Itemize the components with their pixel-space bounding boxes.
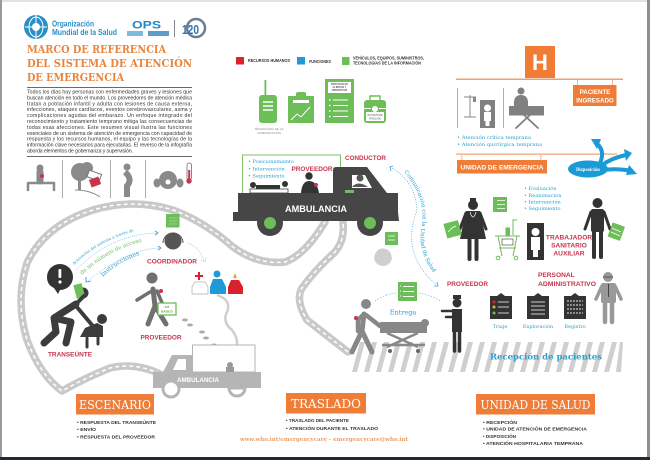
functions panel — [242, 155, 340, 195]
organization name: Organización — [52, 20, 94, 28]
functions list — [524, 185, 562, 212]
icon: protocols document: CLÍNICOS Y — [333, 86, 347, 89]
icon: walking provider — [137, 272, 176, 324]
truck body: AMBULANCIA — [285, 204, 348, 214]
icon: chart clipboard — [288, 92, 314, 123]
organization name — [52, 20, 117, 37]
thin road to gray ambulance — [217, 295, 237, 345]
icon: walking provider: KIT — [165, 305, 170, 309]
intro text: todas esas afecciones. Este resumen visual ilustra las funciones — [27, 125, 192, 131]
disposition arrows — [568, 139, 637, 178]
icon: radio: COMUNICACIÓN — [257, 130, 281, 135]
disposition arrows: Disposición — [576, 166, 600, 173]
icon: hospital H: H — [532, 50, 548, 75]
gray ambulance: AMBULANCIA — [177, 377, 219, 384]
gray ambulance — [153, 345, 261, 397]
wheels — [257, 210, 383, 236]
intro text — [27, 90, 192, 154]
intro text: información clave necesarios para ejecutarlas. El reverso de la infografía — [27, 143, 192, 149]
panel: traslado: • TRASLADO DEL PACIENTE — [286, 418, 349, 423]
intro text: aborda elementos de gobernanza y supervisión. — [27, 148, 133, 154]
handover: Entrega — [390, 308, 416, 316]
icon: green document — [493, 197, 507, 212]
logo: 120: 120 — [182, 22, 199, 37]
label: administrative staff — [538, 272, 596, 288]
icon: equipment cart — [495, 220, 520, 260]
emergency unit box: UNIDAD DE EMERGENCIA — [460, 164, 544, 172]
icon: child — [80, 314, 107, 347]
call section — [40, 214, 261, 398]
label: auxiliary health worker: SANITARIO — [551, 242, 587, 250]
truck body — [233, 167, 399, 221]
triage clipboard — [490, 293, 512, 330]
exploration clipboard — [523, 293, 554, 330]
icon: chest pain — [28, 164, 54, 190]
label: administrative staff: PERSONAL — [538, 272, 575, 279]
icon: hospital H — [525, 46, 555, 78]
icon: bystander with alert — [44, 264, 92, 343]
label: provider: PROVEEDOR — [292, 166, 333, 173]
label: patient reception: Recepción de pacientes — [490, 352, 603, 362]
dispatch vehicles — [192, 270, 243, 294]
legend: human resources: RECURSOS HUMANOS — [248, 58, 290, 63]
intro text: esenciales de un sistema de atención de emergencia con capacidad de — [27, 131, 192, 137]
emergency unit staff — [443, 185, 625, 260]
label: administrative staff: ADMINISTRATIVO — [538, 281, 596, 288]
functions list: • Reanimación — [524, 192, 562, 199]
activation arcs: Instrucciones — [100, 252, 140, 277]
panel: unidad de salud: • DISPOSICIÓN — [483, 432, 517, 439]
intro text: Todos los días hay personas con enfermedades graves y lesiones que — [27, 90, 192, 96]
panel: unidad de salud: UNIDAD DE SALUD — [480, 397, 590, 412]
legend: functions — [297, 57, 331, 64]
icon: walking provider: BÁSICO — [161, 308, 173, 314]
icon: transport kit — [364, 96, 386, 123]
icon: protocols document — [325, 79, 354, 123]
legend — [236, 54, 424, 66]
intro text: infecciones, ataques cardíacos, eventos cerebrovasculares, asma y — [27, 107, 192, 113]
icon: road accident — [71, 162, 102, 197]
organization name: Mundial de la Salud — [52, 28, 117, 37]
panel: traslado: TRASLADO — [291, 396, 361, 411]
icon: stretcher with patient — [380, 319, 429, 353]
label: coordinator: COORDINADOR — [147, 258, 197, 266]
title — [27, 43, 192, 84]
icon: protocols document: PROTOCOLOS — [331, 83, 348, 86]
title: MARCO DE REFERENCIA — [27, 43, 166, 56]
crosswalk — [352, 342, 623, 372]
handover — [375, 282, 441, 316]
icon: sick child — [154, 171, 184, 189]
coordinator green document and headset at truck — [374, 232, 398, 266]
early care list: • Atención quirúrgica temprana — [457, 141, 542, 148]
panel: unidad de salud: • RECEPCIÓN — [483, 418, 518, 425]
footprints — [182, 318, 220, 354]
icon: green clipboard — [443, 220, 462, 239]
register clipboard — [564, 293, 586, 330]
activation arcs: Activación del sistema a través de — [73, 229, 134, 265]
icon: stretcher carrier — [352, 299, 380, 352]
communication with health unit — [390, 166, 438, 286]
early care list — [457, 134, 542, 148]
activation arcs: de un número de acceso — [80, 239, 142, 274]
label: bystander: TRANSEÚNTE — [48, 350, 93, 358]
icon: transport kit: TRASLADO — [369, 118, 381, 120]
emergency unit top — [456, 46, 637, 178]
legend: vehicles and equipment — [342, 54, 424, 66]
panel: escenario — [76, 394, 156, 440]
road — [21, 204, 348, 391]
main ambulance — [233, 155, 399, 236]
label: conductor: CONDUCTOR — [345, 155, 386, 162]
icon: coordinator — [163, 214, 206, 262]
panel: unidad de salud — [476, 394, 595, 446]
icon: nurse — [460, 198, 486, 259]
logo: OPS — [127, 20, 169, 36]
legend: functions: FUNCIONES — [309, 59, 331, 64]
register clipboard: Registro — [564, 324, 586, 330]
admitted patient box: INGRESADO — [576, 98, 614, 104]
reception — [352, 272, 623, 372]
icon: thermometer — [186, 163, 192, 184]
functions list: • Seguimiento — [524, 206, 560, 212]
activation arcs — [73, 229, 162, 282]
panel: unidad de salud: • UNIDAD DE ATENCIÓN DE EMERGENCIA — [483, 424, 588, 432]
icon: auxiliary worker — [585, 198, 610, 257]
intro text: respuesta y los recursos humanos, el equipo y las tecnologías de la — [27, 137, 192, 143]
label: provider: PROVEEDOR — [140, 334, 182, 342]
panel: escenario: ESCENARIO — [79, 397, 151, 412]
legend: vehicles and equipment: TECNOLOGÍAS DE LA INFORMACIÓN — [353, 58, 421, 66]
intro text: tratan a población infantil y adulta con lesiones de causa externa, — [27, 101, 192, 107]
condition icons row — [28, 160, 192, 198]
panel: escenario: • ENVÍO — [77, 425, 96, 432]
admitted patient box: PACIENTE — [580, 89, 610, 96]
legend: human resources — [236, 57, 290, 64]
functions panel: • Seguimiento — [248, 174, 284, 180]
icon: administrative man — [596, 272, 621, 322]
icon: patient on bed — [527, 223, 544, 260]
logo: OPS: OPS — [132, 20, 161, 32]
functions panel: • Posicionamiento — [248, 159, 294, 165]
intro text: complicaciones agudas del embarazo. Un enfoque integrado del — [27, 113, 192, 119]
title: DE EMERGENCIA — [27, 71, 124, 84]
functions list: • Intervención — [524, 198, 562, 206]
label: auxiliary health worker: TRABAJADOR — [546, 234, 592, 242]
icon: radio — [254, 80, 284, 135]
emergency unit box — [457, 160, 547, 174]
communication with health unit: Comunicación con la Unidad de Salud — [405, 170, 436, 272]
functions list: • Evaluación — [524, 185, 557, 192]
legend: vehicles and equipment: VEHÍCULOS, EQUIPOS, SUMINISTROS, — [353, 54, 424, 60]
logo: WHO — [24, 15, 48, 40]
label: provider: PROVEEDOR — [447, 281, 488, 288]
logos header — [24, 15, 205, 40]
patient and provider — [250, 172, 319, 193]
title: DEL SISTEMA DE ATENCIÓN — [27, 56, 192, 70]
panel: unidad de salud: • ATENCIÓN HOSPITALARIA TEMPRANA — [483, 439, 584, 446]
icon: green document tilted — [608, 222, 625, 241]
triage clipboard: Triaje — [493, 324, 507, 330]
panel: escenario: • RESPUESTA DEL TRANSEÚNTE — [77, 419, 156, 425]
icon: transport kit: BOTIQUÍN DE — [368, 114, 383, 117]
label: auxiliary health worker — [546, 234, 592, 258]
panel: traslado: • ATENCIÓN DURANTE EL TRASLADO — [286, 424, 378, 431]
icon: pregnant woman — [124, 164, 130, 197]
early care list: • Atención crítica temprana — [457, 134, 531, 141]
functions panel: • Intervención — [248, 166, 286, 172]
icon: receiving provider — [442, 295, 462, 351]
equipment icons — [254, 79, 386, 135]
icon: surgery — [509, 88, 544, 128]
admitted patient box — [573, 85, 616, 106]
intro text: reconocimiento y tratamiento temprano mitiga las consecuencias de — [27, 119, 192, 125]
intro text: buscan atención en todo el mundo. Los proveedores de atención médica — [27, 95, 192, 101]
panel: escenario: • RESPUESTA DEL PROVEEDOR — [77, 434, 156, 440]
contact links: www.who.int/emergencycare - emergencycare@who.int — [239, 436, 408, 443]
label: auxiliary health worker: AUXILIAR — [553, 250, 585, 258]
icon: radio: TECNOLOGÍA DE LA — [254, 127, 284, 131]
icon: critical care patient — [464, 95, 495, 128]
exploration clipboard: Exploración — [523, 323, 554, 330]
icon: protocols document: OPERATIVOS — [332, 89, 348, 92]
panel: traslado — [286, 393, 378, 431]
